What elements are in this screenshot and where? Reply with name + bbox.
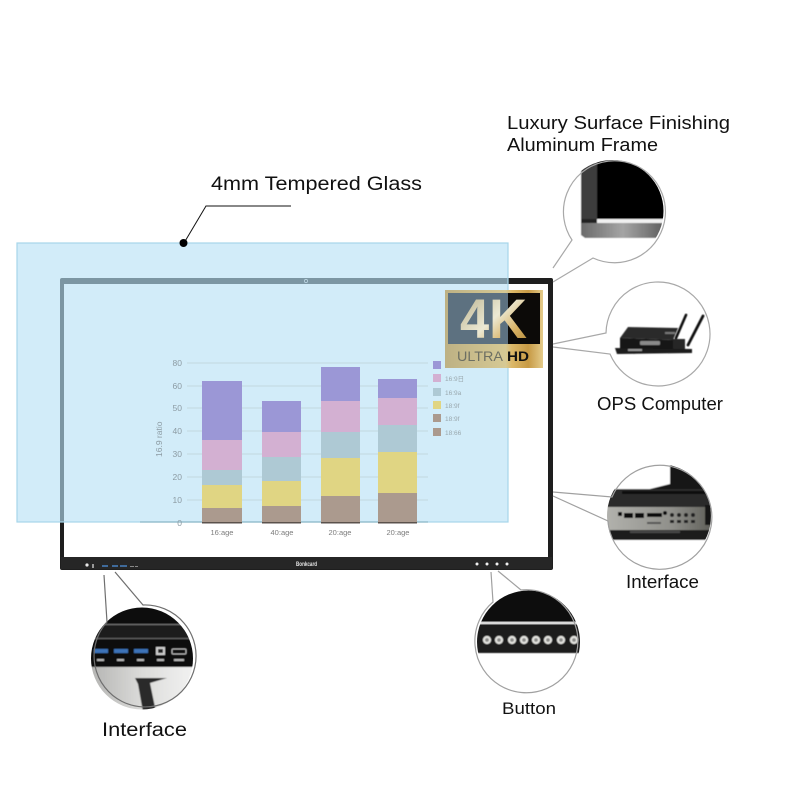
bar: first group	[202, 381, 242, 524]
callout: buttons	[470, 571, 588, 693]
stacked bar chart: 80	[173, 358, 182, 368]
callout: side interface	[552, 464, 712, 570]
stacked bar chart	[140, 358, 464, 537]
stacked bar chart: 0	[177, 518, 182, 528]
chart legend: 16:9a	[445, 390, 462, 397]
stacked bar chart: 60	[173, 381, 182, 391]
stacked bar chart: 20:age	[329, 528, 351, 537]
label: side interface: Interface	[626, 572, 699, 592]
display monitor	[60, 278, 553, 570]
tempered glass panel	[17, 243, 508, 522]
4K Ultra HD badge: 4K	[460, 287, 527, 350]
stacked bar chart: 20:age	[387, 528, 409, 537]
heading: tempered glass: 4mm Tempered Glass	[211, 174, 422, 195]
chart legend	[433, 361, 464, 437]
label: button: Button	[502, 699, 556, 718]
4K Ultra HD badge: HD	[507, 348, 529, 364]
chart legend: 16:9日	[445, 375, 464, 383]
stacked bar chart: 16.9 ratio	[154, 421, 164, 457]
callout: front ports	[91, 572, 197, 710]
label: front interface: Interface	[102, 720, 187, 741]
callout: aluminum frame	[552, 160, 666, 282]
stacked bar chart: 30	[173, 449, 182, 459]
stacked bar chart: 20	[173, 472, 182, 482]
heading: surface finishing: Luxury Surface Finishing	[507, 113, 730, 133]
stacked bar chart: 16:age	[211, 528, 233, 537]
stacked bar chart: 50	[173, 403, 182, 413]
chart legend: 18:66	[445, 430, 462, 437]
stacked bar chart: 40	[173, 426, 182, 436]
heading: surface finishing: Aluminum Frame	[507, 135, 658, 155]
4K Ultra HD badge: ULTRA	[457, 348, 504, 364]
bar: third group	[321, 367, 360, 524]
bar: fourth group	[378, 379, 417, 524]
chart legend: 18:9f	[445, 403, 460, 410]
chart legend: 18:9f	[445, 416, 460, 423]
label: OPS computer: OPS Computer	[597, 394, 723, 414]
4K Ultra HD badge	[445, 287, 543, 368]
stacked bar chart: 10	[173, 495, 182, 505]
heading: surface finishing	[507, 113, 730, 155]
callout: OPS computer	[553, 282, 710, 386]
glass leader line	[180, 206, 291, 247]
display monitor: Bonkcard	[296, 562, 317, 568]
bar: second group	[262, 401, 301, 524]
stacked bar chart: 40:age	[271, 528, 293, 537]
